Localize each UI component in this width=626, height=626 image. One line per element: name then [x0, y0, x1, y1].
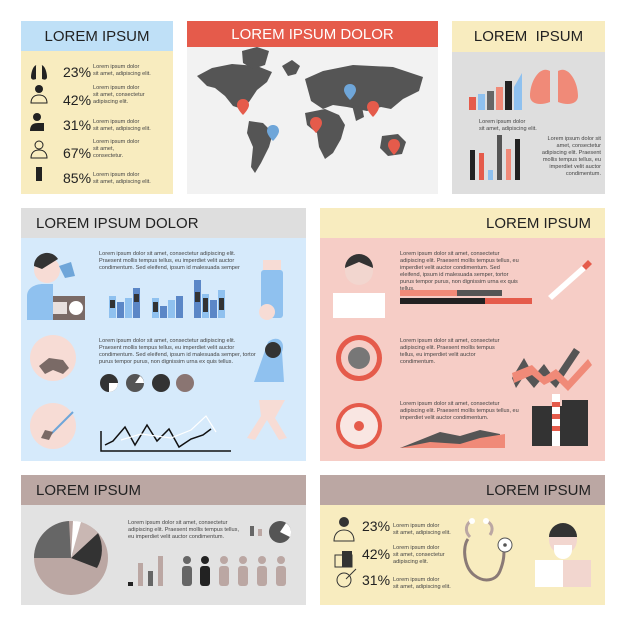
heading	[187, 21, 438, 47]
stat rows	[30, 64, 151, 186]
heading: LOREM IPSUM DOLOR	[36, 215, 199, 232]
stethoscope	[465, 539, 504, 580]
panel: stats bottom-right: 31%	[362, 572, 390, 588]
charts and lungs	[469, 70, 578, 180]
panel: stats bottom-right: 42%	[362, 546, 390, 562]
panel: stats bottom-right: sit amet, adipiscing elit.	[393, 584, 451, 590]
stat rows: consectetur.	[93, 153, 123, 159]
stat rows: sit amet,	[93, 146, 114, 152]
heading	[320, 208, 605, 238]
panel: stats bottom-right	[320, 475, 605, 605]
panel: stats top-left	[21, 21, 173, 194]
stat rows: sit amet, adipiscing elit.	[93, 179, 151, 185]
panel: stats bottom-right: sit amet, adipiscing elit.	[393, 530, 451, 536]
stat rows: 23%	[63, 64, 91, 80]
heading: LOREM IPSUM	[474, 28, 583, 45]
charts	[34, 521, 291, 595]
panel: pie and people: Lorem ipsum dolor sit amet, consectetur adipiscing elit. Praesent mollis tempus tellus, eu imperdiet velit auctor condimentum.	[128, 520, 239, 540]
panel: pink lorem ipsum: Lorem ipsum dolor sit amet, consectetur adipiscing elit. Praesent mollis tempus tellus, eu imperdiet velit auctor condimentum.	[400, 338, 500, 365]
stat rows: 85%	[63, 170, 91, 186]
heading: LOREM IPSUM DOLOR	[231, 26, 394, 43]
panel: lungs charts: Lorem ipsum dolor sit amet, consectetur adipiscing elit. Praesent mollis tempus tellus, eu imperdiet velit auctor condimentum.	[542, 136, 601, 177]
panel: stats bottom-right: sit amet, consectetur	[393, 552, 445, 558]
map	[197, 47, 423, 173]
panel: pie and people	[21, 475, 306, 605]
heading	[21, 208, 306, 238]
panel: lorem ipsum dolor blue: Lorem ipsum dolor sit amet, consectetur adipiscing elit. Praesent mollis tempus tellus, eu imperdiet velit auctor condimentum. Sed eleifend, ipsum id malesuada semper	[99, 251, 240, 271]
panel: stats bottom-right: 23%	[362, 518, 390, 534]
panel: lungs charts: sit amet, adipiscing elit.	[479, 126, 537, 132]
stat rows: Lorem ipsum dolor	[93, 119, 139, 125]
stat rows: 42%	[63, 92, 91, 108]
stat rows: 31%	[63, 117, 91, 133]
heading	[320, 475, 605, 505]
panel: lorem ipsum dolor blue	[21, 208, 306, 461]
illustrations	[27, 252, 287, 452]
panel: lorem ipsum dolor blue: Lorem ipsum dolor sit amet, consectetur adipiscing elit. Praesent mollis tempus tellus, eu imperdiet velit auctor condimentum. Sed eleifend, ipsum id malesuada semper, tortor purus tempor purus, non dignissim urna ex quis tellus.	[99, 338, 256, 365]
heading	[21, 21, 173, 51]
heading: LOREM IPSUM	[486, 482, 591, 499]
stat rows: Lorem ipsum dolor	[93, 139, 139, 145]
stats	[334, 517, 591, 588]
panel: lungs charts: Lorem ipsum dolor	[479, 119, 525, 125]
stat rows: sit amet, adipiscing elit.	[93, 126, 151, 132]
heading: LOREM IPSUM	[486, 215, 591, 232]
panel: pink lorem ipsum: Lorem ipsum dolor sit amet, consectetur adipiscing elit. Praesent mollis tempus tellus, eu imperdiet velit auctor condimentum. Sed eleifend, ipsum id malesuada semper, tortor purus tempor purus, non dignissim urna ex quis tellus.	[400, 251, 519, 292]
heading	[452, 21, 605, 52]
panel: pink lorem ipsum	[320, 208, 605, 461]
illustrations	[333, 254, 592, 449]
stat rows: Lorem ipsum dolor	[93, 172, 139, 178]
heading	[21, 475, 306, 505]
stat rows: Lorem ipsum dolor	[93, 85, 139, 91]
stat rows: sit amet, consectetur	[93, 92, 145, 98]
panel: stats bottom-right: Lorem ipsum dolor	[393, 523, 439, 529]
heading: LOREM IPSUM	[44, 28, 150, 45]
panel: lungs charts	[452, 21, 605, 194]
panel: pink lorem ipsum: Lorem ipsum dolor sit amet, consectetur adipiscing elit. Praesent mollis tempus tellus, eu imperdiet velit auctor condimentum.	[400, 401, 519, 421]
stat rows: 67%	[63, 145, 91, 161]
panel: stats bottom-right: Lorem ipsum dolor	[393, 577, 439, 583]
stat rows: adipiscing elit.	[93, 99, 128, 105]
stat rows: sit amet, adipiscing elit.	[93, 71, 151, 77]
panel: world map	[187, 21, 438, 194]
heading: LOREM IPSUM	[36, 482, 141, 499]
stat rows: Lorem ipsum dolor	[93, 64, 139, 70]
panel: stats bottom-right: adipiscing elit.	[393, 559, 428, 565]
panel: stats bottom-right: Lorem ipsum dolor	[393, 545, 439, 551]
